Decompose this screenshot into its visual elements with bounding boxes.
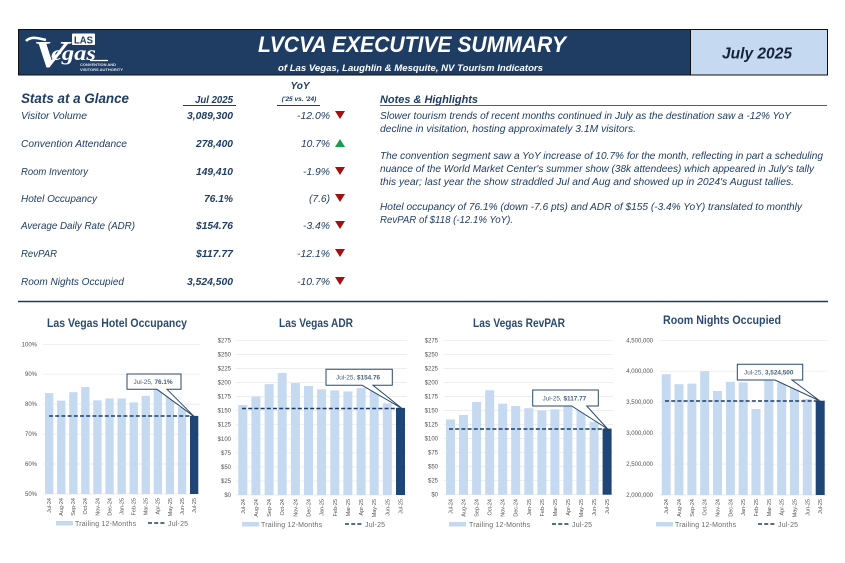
occupancy y axis: 70% — [25, 432, 38, 438]
occupancy x axis: Jun-25 — [180, 498, 186, 515]
chart: Las Vegas ADR — [218, 318, 407, 529]
RevPAR legend — [449, 522, 592, 529]
occupancy x axis: Mar-25 — [144, 498, 150, 515]
room nights y axis: 2,500,000 — [626, 462, 654, 468]
RevPAR y axis: $75 — [428, 451, 439, 457]
chart: Las Vegas RevPAR — [425, 318, 613, 529]
row: hotel occupancy: Hotel Occupancy — [21, 193, 98, 205]
note: convention segment: The convention segment saw a YoY increase of 10.7% for the month, reflecting in part a scheduling — [380, 150, 823, 162]
ADR y axis: $50 — [221, 465, 232, 471]
ADR y axis: $75 — [221, 451, 232, 457]
occupancy y axis: 80% — [25, 402, 38, 408]
row: convention attendance — [21, 138, 345, 150]
ADR y axis: $100 — [218, 437, 232, 443]
room nights x axis: Aug-24 — [677, 499, 683, 517]
room nights x axis: Nov-24 — [716, 499, 722, 517]
occupancy y axis: 60% — [25, 462, 38, 468]
room nights legend — [656, 522, 798, 529]
RevPAR chart title: Las Vegas RevPAR — [473, 318, 566, 330]
row: room nights occupied: -10.7% — [297, 276, 330, 288]
RevPAR callout: Jul-25, $117.77 — [542, 395, 587, 402]
RevPAR x axis: Dec-24 — [514, 499, 520, 517]
row: visitor volume: Visitor Volume — [21, 110, 87, 122]
RevPAR y axis: $225 — [425, 366, 439, 372]
room nights x axis: Oct-24 — [703, 499, 709, 516]
ADR legend — [242, 522, 385, 529]
RevPAR x axis: Jan-25 — [527, 499, 533, 516]
room nights chart title: Room Nights Occupied — [663, 315, 781, 327]
subtitle: of Las Vegas, Laughlin & Mesquite, NV Tourism Indicators — [278, 63, 543, 74]
occupancy y axis: 50% — [25, 492, 38, 498]
ADR y axis: $275 — [218, 338, 232, 344]
chart: room nights occupied — [626, 315, 827, 529]
note: visitation: Slower tourism trends of recent months continued in July as the destination saw a -12% YoY — [380, 110, 792, 122]
occupancy x axis: Dec-24 — [107, 498, 113, 516]
ADR legend: Jul-25 — [365, 522, 385, 529]
RevPAR x axis: Jul-25 — [605, 499, 611, 514]
ADR y axis: $25 — [221, 479, 232, 485]
room nights x axis: Sep-24 — [690, 499, 696, 517]
note: hotel occupancy and ADR: RevPAR of $118 (-12.1% YoY). — [380, 214, 513, 226]
room nights x axis: Apr-25 — [780, 499, 786, 516]
occupancy callout — [127, 374, 194, 417]
room nights x axis — [664, 499, 824, 517]
occupancy y axis: 100% — [22, 342, 38, 348]
room nights x axis: Jun-25 — [805, 499, 811, 516]
room nights x axis: Jan-25 — [741, 499, 747, 516]
row: room nights occupied: Room Nights Occupied — [21, 276, 125, 288]
ADR y axis: $150 — [218, 409, 232, 415]
occupancy x axis: Jul-24 — [47, 498, 53, 513]
row: hotel occupancy — [21, 193, 345, 205]
row: room inventory: 149,410 — [196, 166, 233, 178]
logo: Las Vegas: CONVENTION AND — [80, 63, 116, 67]
row: convention attendance: 10.7% — [301, 138, 330, 150]
column header: YoY — [277, 81, 320, 106]
occupancy x axis: Jul-25 — [192, 498, 198, 513]
ADR x axis: Dec-24 — [306, 499, 312, 517]
ADR y axis: $0 — [224, 493, 232, 499]
note: hotel occupancy and ADR: Hotel occupancy of 76.1% (down -7.6 pts) and ADR of $155 (-3.4% YoY) translated to monthly — [380, 201, 803, 213]
room nights x axis: Jul-24 — [664, 499, 670, 514]
RevPAR y axis: $50 — [428, 465, 439, 471]
ADR Jul-25 reference line — [242, 408, 401, 410]
occupancy y axis: 90% — [25, 372, 38, 378]
RevPAR Jul-25 reference line — [449, 428, 607, 430]
header band — [18, 30, 690, 76]
RevPAR legend: Jul-25 — [572, 522, 592, 529]
panel: notes and highlights — [380, 94, 827, 226]
ADR x axis: Mar-25 — [346, 499, 352, 516]
row: average daily rate: Average Daily Rate (ADR) — [20, 220, 135, 232]
row: convention attendance: Convention Attendance — [21, 138, 127, 150]
room nights callout — [737, 364, 820, 401]
occupancy legend — [56, 521, 188, 528]
room nights callout: Jul-25, 3,524,500 — [744, 370, 794, 376]
room nights x axis: Mar-25 — [767, 499, 773, 516]
ADR callout: Jul-25, $154.76 — [336, 375, 381, 382]
main title: LVCVA EXECUTIVE SUMMARY — [258, 32, 568, 57]
row: average daily rate — [20, 220, 345, 232]
room nights x axis: May-25 — [792, 499, 798, 517]
room nights y axis: 4,000,000 — [626, 369, 654, 375]
chart: Las Vegas hotel occupancy — [22, 318, 200, 528]
RevPAR y axis: $25 — [428, 479, 439, 485]
row: average daily rate: $154.76 — [195, 220, 233, 232]
occupancy Jul-25 reference line — [49, 415, 194, 417]
note: visitation: decline in visitation, hosting approximately 3.1M visitors. — [380, 123, 636, 135]
occupancy chart title: Las Vegas Hotel Occupancy — [47, 318, 188, 330]
occupancy x axis: Aug-24 — [59, 498, 65, 516]
RevPAR y axis: $150 — [425, 408, 439, 414]
occupancy bars — [45, 387, 198, 494]
note: hotel occupancy and ADR — [380, 201, 803, 226]
occupancy x axis — [47, 498, 198, 516]
row: RevPAR: $117.77 — [195, 248, 234, 260]
room nights x axis: Dec-24 — [728, 499, 734, 517]
ADR x axis: Nov-24 — [293, 499, 299, 517]
logo: Las Vegas: LAS — [74, 34, 93, 46]
ADR bars — [238, 373, 405, 495]
row: RevPAR: RevPAR — [21, 248, 57, 260]
ADR chart title: Las Vegas ADR — [279, 318, 354, 330]
RevPAR x axis: Nov-24 — [501, 499, 507, 517]
row: room inventory: Room Inventory — [21, 166, 89, 178]
row: hotel occupancy: 76.1% — [204, 193, 234, 205]
notes heading: Notes & Highlights — [380, 94, 478, 106]
note: convention segment — [380, 150, 823, 188]
room nights x axis: Feb-25 — [754, 499, 760, 516]
room nights y axis — [626, 338, 654, 499]
occupancy x axis: May-25 — [168, 498, 174, 516]
row: convention attendance: 278,400 — [195, 138, 233, 150]
RevPAR y axis: $200 — [425, 380, 439, 386]
ADR legend: Trailing 12-Months — [261, 522, 323, 529]
ADR x axis: Oct-24 — [280, 499, 286, 516]
row: room inventory — [21, 166, 345, 178]
row: visitor volume — [21, 110, 345, 122]
RevPAR x axis: Mar-25 — [553, 499, 559, 516]
row: room nights occupied — [21, 276, 345, 288]
RevPAR x axis: Sep-24 — [475, 499, 481, 517]
RevPAR y axis: $275 — [425, 338, 439, 344]
room nights legend: Jul-25 — [778, 522, 798, 529]
room nights y axis: 3,500,000 — [626, 400, 654, 406]
ADR y axis — [218, 338, 232, 499]
ADR x axis: Aug-24 — [254, 499, 260, 517]
row: room inventory: -1.9% — [303, 166, 330, 178]
note: convention segment: nuance of the World Market Center's summer show (38k attendees) which appeared in July's tally — [380, 163, 815, 175]
RevPAR y axis: $0 — [431, 493, 439, 499]
RevPAR x axis: Jun-25 — [592, 499, 598, 516]
RevPAR y axis: $125 — [425, 423, 439, 429]
ADR y axis: $125 — [218, 423, 232, 429]
row: visitor volume: 3,089,300 — [187, 110, 233, 122]
RevPAR legend: Trailing 12-Months — [469, 522, 531, 529]
logo: Las Vegas: VISITORS AUTHORITY — [80, 68, 124, 72]
ADR x axis: Feb-25 — [333, 499, 339, 516]
date box: July 2025 — [722, 46, 792, 62]
occupancy legend: Trailing 12-Months — [75, 521, 137, 528]
row: RevPAR: -12.1% — [297, 248, 330, 260]
note: convention segment: this year; last year the show straddled Jul and Aug and showed up in 2024's August tallies. — [380, 176, 794, 188]
RevPAR x axis: Jul-24 — [448, 499, 454, 514]
ADR callout — [326, 369, 402, 408]
column header: YoY: YoY — [290, 81, 311, 92]
occupancy x axis: Feb-25 — [132, 498, 138, 515]
panel: stats at a glance — [20, 81, 345, 288]
column header: YoY: ('25 vs. '24) — [282, 96, 316, 103]
row: RevPAR — [21, 248, 345, 260]
RevPAR x axis: Aug-24 — [462, 499, 468, 517]
RevPAR x axis: Feb-25 — [540, 499, 546, 516]
RevPAR y axis: $100 — [425, 437, 439, 443]
occupancy x axis: Jan-25 — [120, 498, 126, 515]
occupancy legend: Jul-25 — [168, 521, 188, 528]
ADR x axis: Jul-25 — [398, 499, 404, 514]
RevPAR bars — [446, 390, 612, 495]
ADR x axis — [241, 499, 404, 517]
RevPAR y axis — [425, 338, 439, 499]
row: average daily rate: -3.4% — [303, 220, 330, 232]
date box — [690, 30, 828, 75]
ADR x axis: Jan-25 — [320, 499, 326, 516]
occupancy x axis: Sep-24 — [71, 498, 77, 516]
logo: Las Vegas: V — [33, 34, 72, 76]
occupancy x axis: Oct-24 — [83, 498, 89, 515]
room nights bars — [662, 371, 825, 495]
logo: Las Vegas: egas — [51, 43, 96, 65]
column header: Jul 2025: Jul 2025 — [195, 95, 233, 106]
occupancy x axis: Nov-24 — [95, 498, 101, 516]
room nights y axis: 2,000,000 — [626, 493, 654, 499]
room nights x axis: Jul-25 — [818, 499, 824, 514]
row: hotel occupancy: (7.6) — [309, 193, 330, 205]
ADR y axis: $225 — [218, 366, 232, 372]
ADR x axis: Sep-24 — [267, 499, 273, 517]
RevPAR y axis: $175 — [425, 394, 439, 400]
ADR x axis: Jun-25 — [385, 499, 391, 516]
ADR y axis: $200 — [218, 380, 232, 386]
RevPAR x axis — [448, 499, 611, 517]
RevPAR callout — [533, 390, 608, 429]
room nights legend: Trailing 12-Months — [675, 522, 737, 529]
occupancy x axis: Apr-25 — [156, 498, 162, 515]
occupancy callout: Jul-25, 76.1% — [134, 379, 173, 386]
note: visitation — [380, 110, 792, 135]
RevPAR y axis: $250 — [425, 352, 439, 358]
room nights y axis: 3,000,000 — [626, 431, 654, 437]
occupancy y axis — [22, 342, 38, 498]
room nights y axis: 4,500,000 — [626, 338, 654, 344]
RevPAR x axis: Apr-25 — [566, 499, 572, 516]
ADR x axis: Jul-24 — [241, 499, 247, 514]
ADR x axis: May-25 — [372, 499, 378, 517]
row: room nights occupied: 3,524,500 — [187, 276, 233, 288]
RevPAR x axis: May-25 — [579, 499, 585, 517]
room nights Jul-25 reference line — [665, 400, 820, 402]
ADR x axis: Apr-25 — [359, 499, 365, 516]
row: visitor volume: -12.0% — [297, 110, 330, 122]
ADR y axis: $250 — [218, 352, 232, 358]
RevPAR x axis: Oct-24 — [488, 499, 494, 516]
stats heading: Stats at a Glance — [21, 91, 129, 106]
logo: Las Vegas — [26, 34, 124, 76]
ADR y axis: $175 — [218, 395, 232, 401]
